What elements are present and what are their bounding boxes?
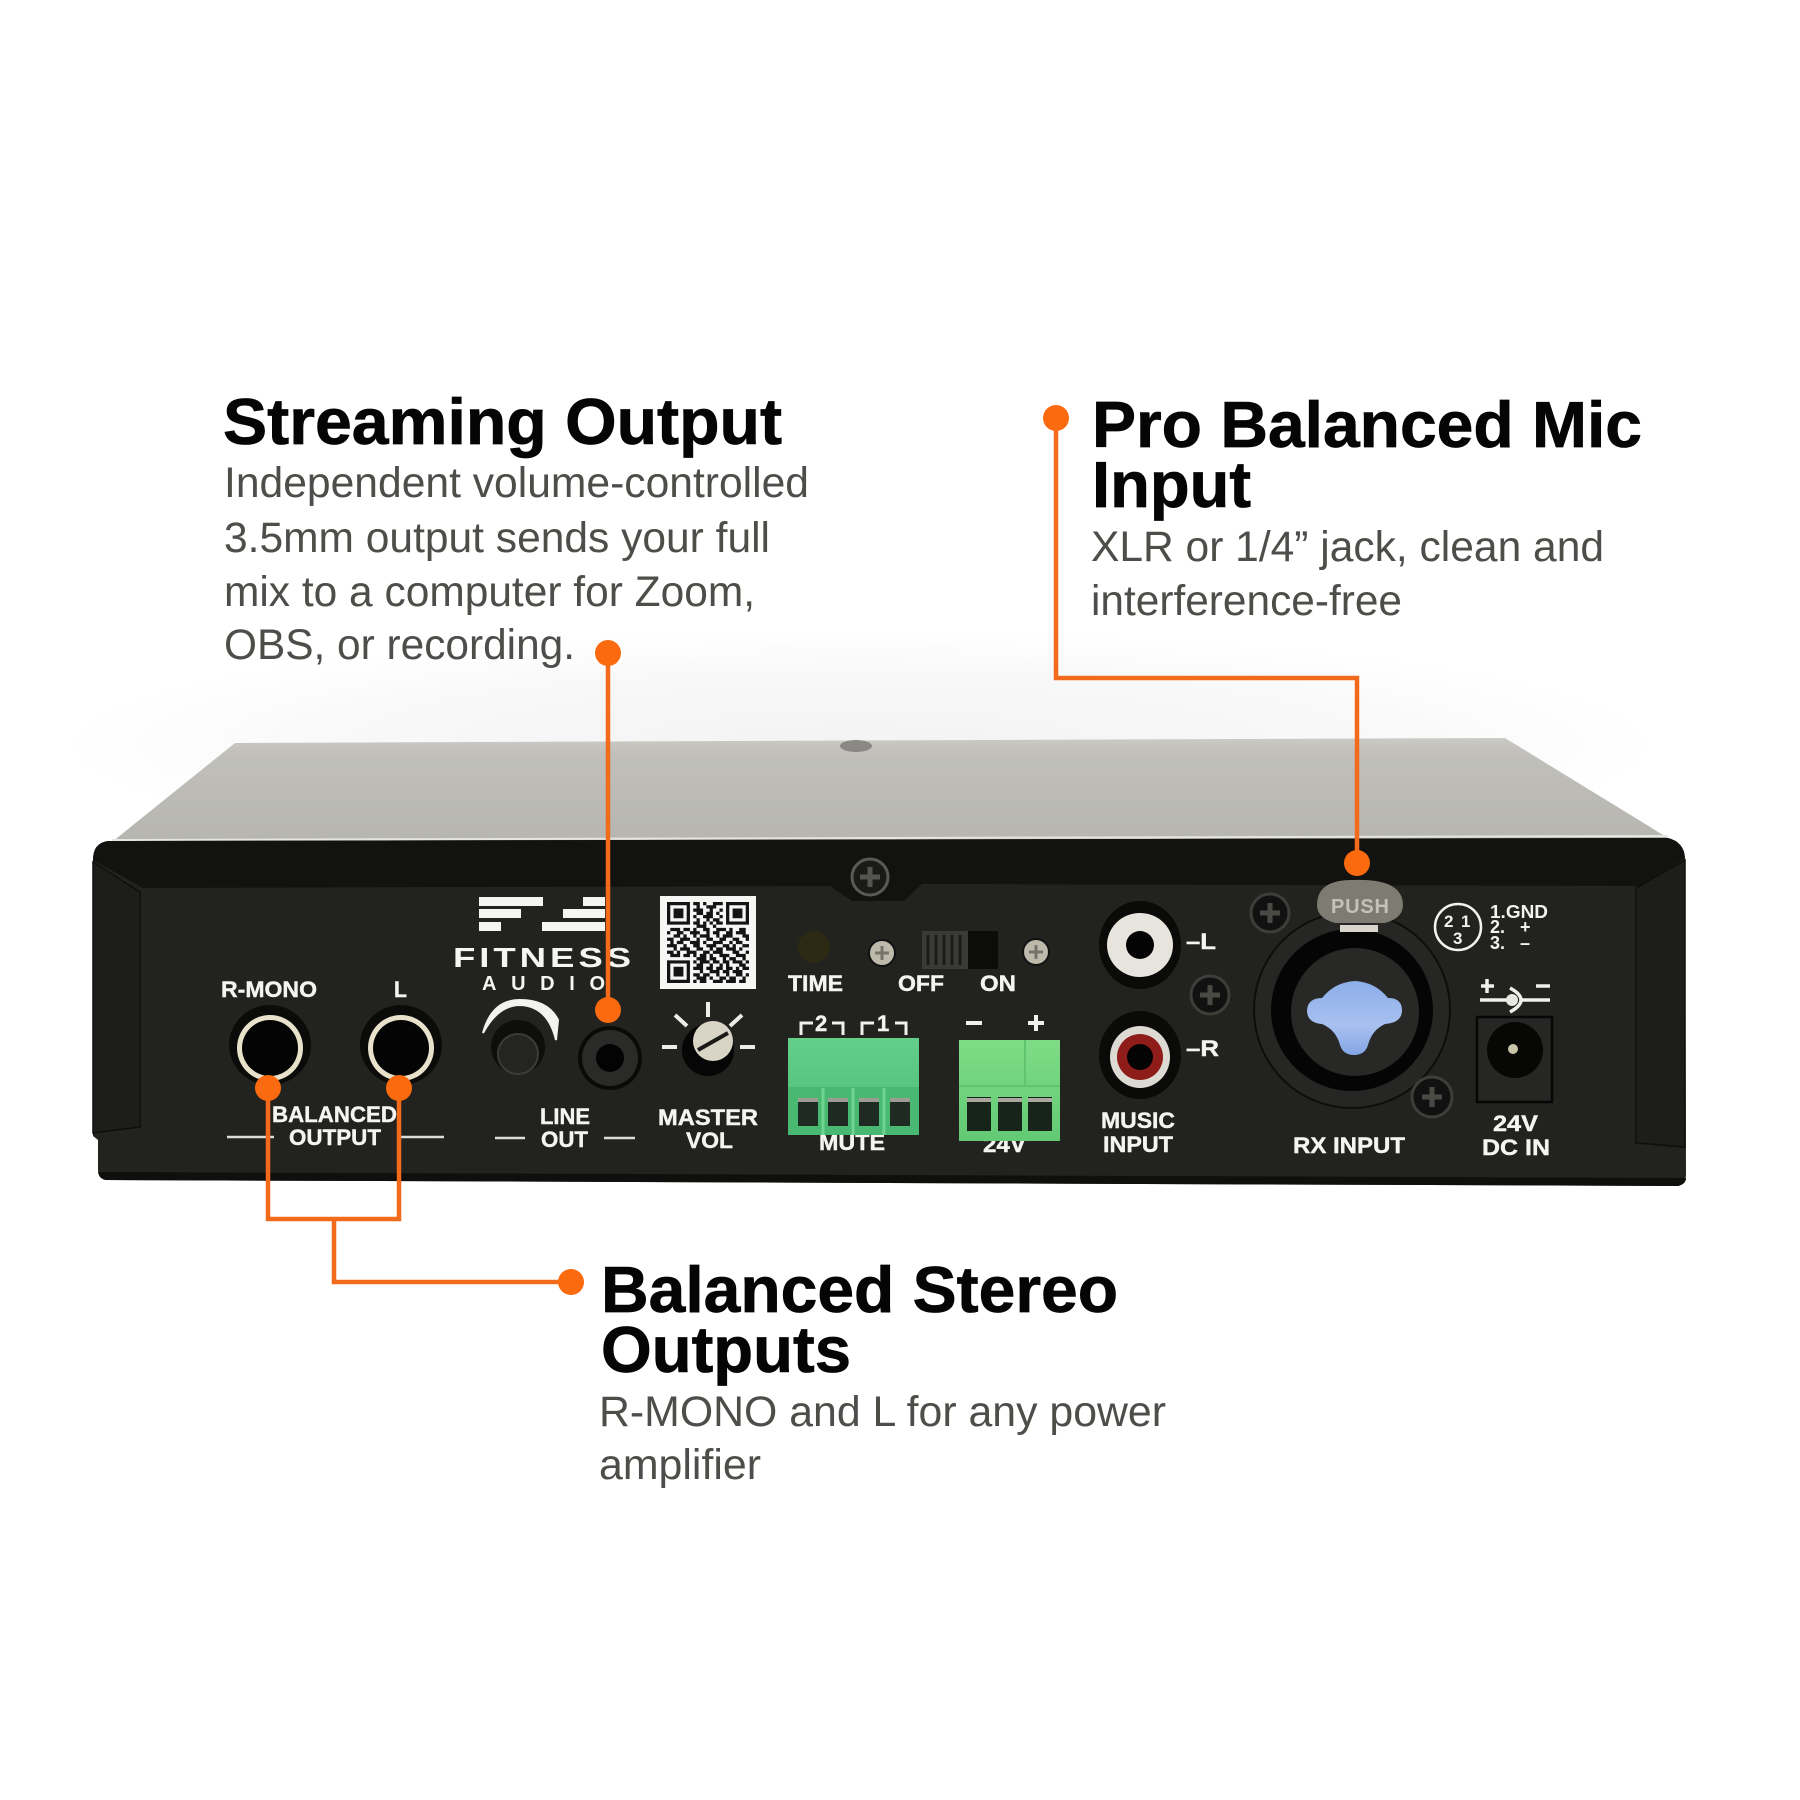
XLR pinout legend: 2. + [1490,917,1531,937]
heading: pro balanced mic input [1092,388,1642,521]
logo: Fitness Audio: AUDIO [482,973,605,995]
body text: streaming output [224,459,809,669]
XLR pinout legend [1435,902,1548,953]
label: line out [495,1104,635,1152]
DC polarity symbol [1480,979,1550,1012]
master volume knob [662,1002,755,1076]
XLR combo connector [1254,880,1450,1108]
label: music input [1101,1108,1175,1157]
heading: streaming output: Streaming Output [223,385,782,458]
switch screw left [869,940,895,966]
heading: pro balanced mic input: Pro Balanced Mic [1092,388,1642,461]
body text: streaming output: OBS, or recording. [224,621,575,669]
label: balanced output: OUTPUT [289,1125,382,1150]
RCA jack: right [1099,1011,1181,1099]
heading: balanced stereo outputs [601,1253,1118,1386]
label: 24V DC in: 24V [1493,1111,1538,1136]
heading: balanced stereo outputs: Outputs [601,1313,851,1386]
label: balanced output [227,1102,444,1150]
RCA jack: left [1099,901,1181,989]
callout: streaming output [223,385,809,1023]
connector: mic input to XLR [1043,405,1370,876]
push knob with arc arrow [483,1000,558,1074]
background shadow glow behind device [60,630,1660,860]
DC power jack [1477,1017,1552,1102]
body text: streaming output: Independent volume-controlled [224,459,809,507]
label: master vol: MASTER [658,1105,758,1130]
screw: XLR lower [1412,1077,1452,1117]
label: line out: OUT [541,1127,589,1152]
on off switch [922,931,998,969]
device front body [93,838,1686,1186]
mute channel brackets: 2 [815,1011,827,1036]
label: L: L [394,977,407,1002]
heading: balanced stereo outputs: Balanced Stereo [601,1253,1118,1326]
XLR pinout legend: 1 [1461,912,1470,931]
screw: XLR upper [1251,894,1289,932]
label: balanced output: BALANCED [272,1102,397,1127]
QR code [660,896,756,989]
label: 24V terminal: 24V [983,1132,1026,1157]
label: R-MONO: R-MONO [221,977,317,1002]
connector: streaming output to line out jack [595,640,621,1023]
label: mute: MUTE [819,1130,885,1155]
body text: stereo outputs: amplifier [599,1441,761,1489]
bottom lip [98,1172,1686,1186]
XLR pinout legend: 3 [1453,929,1462,948]
callout: pro balanced mic input [1043,388,1642,876]
polarity marks [966,1015,1044,1031]
logo: Fitness Audio: FITNESS [453,942,635,973]
body text: mic input [1091,523,1604,625]
label: music input: INPUT [1103,1132,1174,1157]
jack: L [360,1005,442,1085]
XLR pinout legend: 3. – [1490,933,1530,953]
terminal block: 24V [959,1040,1060,1141]
terminal block: mute [788,1038,919,1135]
label: music input: MUSIC [1101,1108,1175,1133]
switch screw right [1023,939,1049,965]
device top band with screw tab [93,838,1685,901]
label: -L: –L [1186,929,1216,954]
body text: stereo outputs: R-MONO and L for any power [599,1388,1166,1436]
logo: Fitness Audio [453,897,635,995]
screw: top centre [852,859,888,895]
XLR pinout legend: 1.GND [1490,902,1548,922]
label: master vol: VOL [686,1128,733,1153]
jack: line out [578,1026,642,1090]
screw between RCA jacks [1191,976,1229,1014]
top face mark [840,740,872,752]
connector: stereo outputs to balanced jacks [255,1075,584,1295]
jack: R-MONO [229,1005,311,1085]
label: on: ON [980,971,1016,996]
mute channel brackets [801,1011,906,1036]
device: amplifier rear panel [93,738,1686,1186]
label: 24V DC in: DC IN [1482,1135,1550,1160]
label: time: TIME [788,971,843,996]
callout: balanced stereo outputs [255,1075,1166,1489]
body text: streaming output: mix to a computer for Zoom, [224,568,755,616]
time LED [798,931,830,963]
right side column [1636,860,1685,1147]
XLR pinout legend: 2 [1444,912,1453,931]
label: line out: LINE [540,1104,590,1129]
label: 24V DC in [1482,1111,1550,1160]
device top face [112,738,1668,842]
mute channel brackets: 1 [877,1011,889,1036]
body text: streaming output: 3.5mm output sends your full [224,514,770,562]
label: off: OFF [898,971,944,996]
body text: stereo outputs [599,1388,1166,1489]
label: -R: –R [1186,1036,1219,1061]
body text: mic input: interference-free [1091,577,1402,625]
label: master vol [658,1105,758,1153]
XLR combo connector: PUSH [1331,896,1389,918]
label: RX input: RX INPUT [1293,1133,1406,1158]
left side column [93,862,140,1133]
heading: pro balanced mic input: Input [1092,448,1251,521]
top face front highlight [112,836,1668,840]
body text: mic input: XLR or 1/4” jack, clean and [1091,523,1604,571]
